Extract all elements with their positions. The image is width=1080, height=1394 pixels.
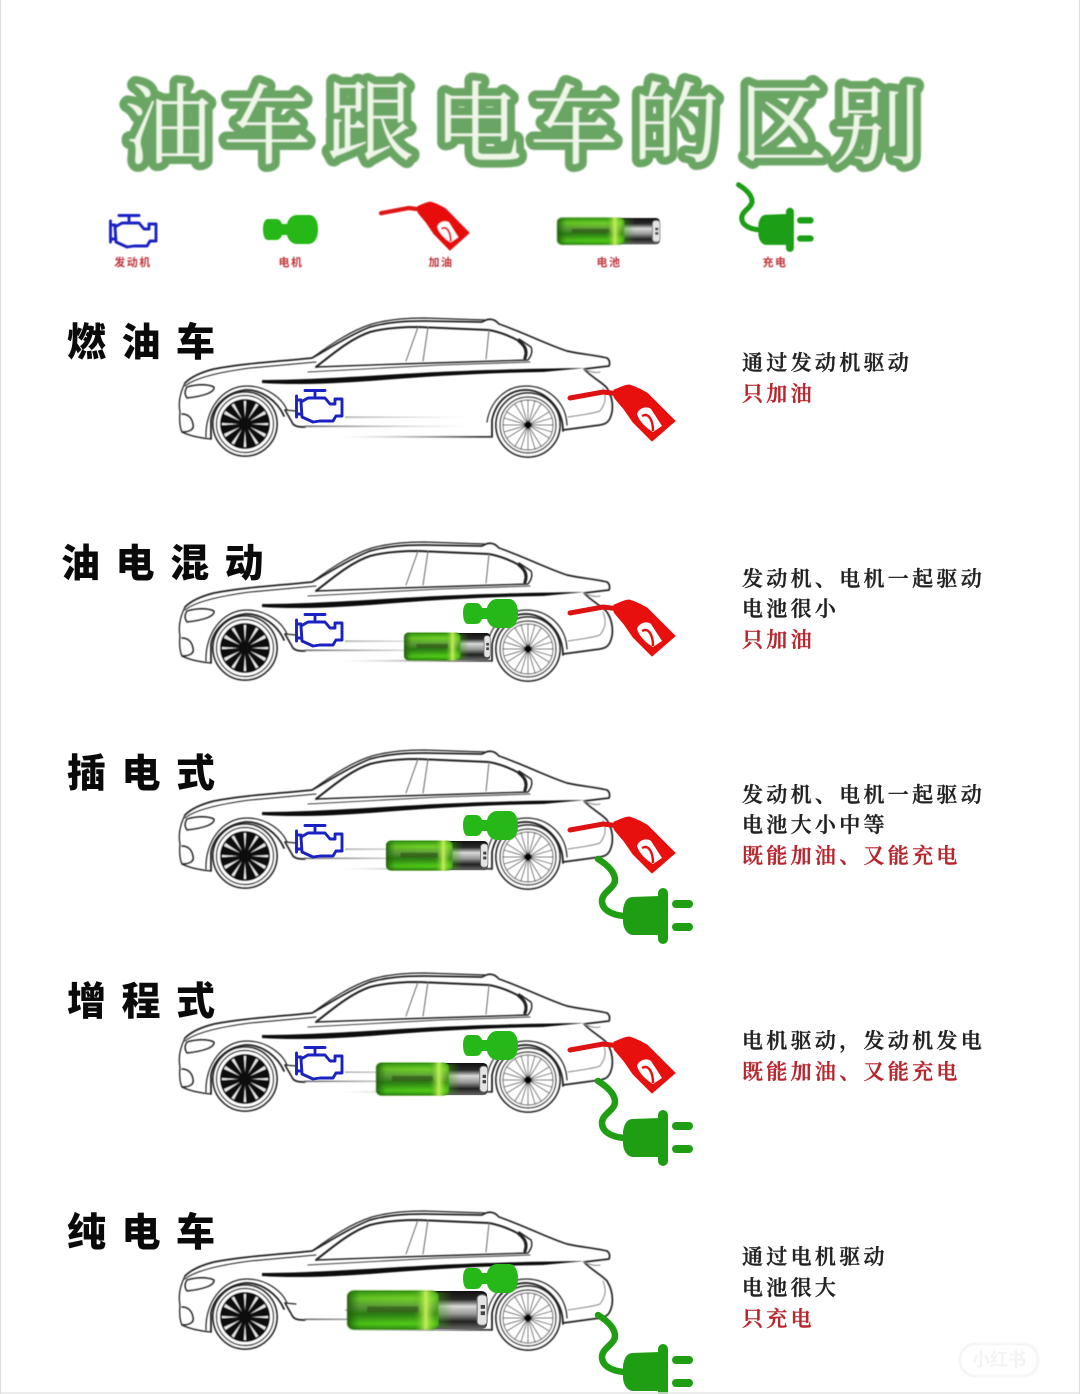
description: petrol car: 通过发动机驱动	[742, 351, 912, 375]
description: plug-in hybrid: 发动机、电机一起驱动	[742, 783, 985, 807]
icon: battery medium	[386, 841, 488, 871]
icon: motor	[463, 811, 518, 840]
icon: motor	[463, 1031, 518, 1060]
title: 别	[833, 80, 921, 177]
heading: hybrid: 油电混动	[61, 543, 279, 586]
title	[124, 76, 921, 177]
heading: petrol car: 燃油车	[67, 322, 231, 365]
legend: battery	[557, 218, 660, 269]
title: 的	[632, 78, 720, 175]
icon: battery very large	[347, 1290, 487, 1330]
watermark: 小红书	[972, 1350, 1026, 1370]
legend: engine	[110, 216, 156, 269]
icon: charging plug	[598, 1315, 693, 1394]
car: range extender	[179, 973, 612, 1112]
icon: engine	[296, 390, 342, 422]
icon: battery small	[404, 633, 490, 660]
icon: motor	[463, 599, 518, 628]
description: pure electric: 只充电	[742, 1307, 815, 1331]
description: hybrid: 电池很小	[742, 597, 839, 621]
title: 跟	[326, 76, 414, 173]
icon: battery large	[376, 1062, 488, 1096]
legend: battery: 电池	[596, 255, 622, 269]
car: pure electric	[179, 1211, 612, 1350]
description: range extender: 既能加油、又能充电	[742, 1060, 961, 1084]
title: 车	[223, 80, 311, 177]
icon: fuel nozzle	[570, 385, 675, 441]
legend: charging: 充电	[762, 255, 788, 269]
panel: petrol car	[67, 318, 912, 457]
watermark	[960, 1344, 1038, 1376]
description: plug-in hybrid: 既能加油、又能充电	[742, 844, 961, 868]
legend	[110, 185, 814, 269]
icon: fuel nozzle	[570, 600, 675, 656]
legend: motor	[263, 215, 318, 269]
legend: motor: 电机	[278, 255, 304, 269]
icon: engine	[296, 614, 342, 646]
description: pure electric: 通过电机驱动	[742, 1245, 888, 1269]
icon: charging plug	[598, 1081, 693, 1166]
title: 区	[739, 78, 827, 175]
icon: charging plug	[598, 859, 693, 944]
car: plug-in hybrid	[179, 750, 612, 889]
icon: motor	[463, 1264, 518, 1293]
panel: pure electric	[67, 1211, 888, 1394]
description: hybrid: 只加油	[742, 628, 815, 652]
description: hybrid: 发动机、电机一起驱动	[742, 567, 985, 591]
title: 电	[434, 78, 522, 175]
legend: engine: 发动机	[114, 255, 152, 269]
legend: refuel	[381, 202, 469, 269]
legend: charging	[739, 185, 814, 269]
car: petrol	[179, 318, 612, 457]
panel: plug-in hybrid	[67, 750, 985, 944]
icon: fuel nozzle	[570, 1037, 675, 1093]
heading: range extender: 增程式	[67, 981, 231, 1024]
panel: range extender	[67, 973, 985, 1166]
icon: engine	[296, 1048, 342, 1079]
heading: pure electric: 纯电车	[67, 1212, 231, 1255]
title: 油	[124, 80, 212, 177]
title: 车	[530, 80, 618, 177]
description: plug-in hybrid: 电池大小中等	[742, 813, 888, 837]
heading: plug-in hybrid: 插电式	[67, 753, 231, 796]
panel: hybrid	[61, 542, 985, 681]
icon: engine	[296, 826, 342, 857]
icon: fuel nozzle	[570, 817, 675, 873]
legend: refuel: 加油	[428, 255, 454, 269]
description: range extender: 电机驱动，发动机发电	[742, 1029, 985, 1053]
car: hybrid	[179, 542, 612, 681]
description: pure electric: 电池很大	[742, 1276, 839, 1300]
description: petrol car: 只加油	[742, 382, 815, 406]
